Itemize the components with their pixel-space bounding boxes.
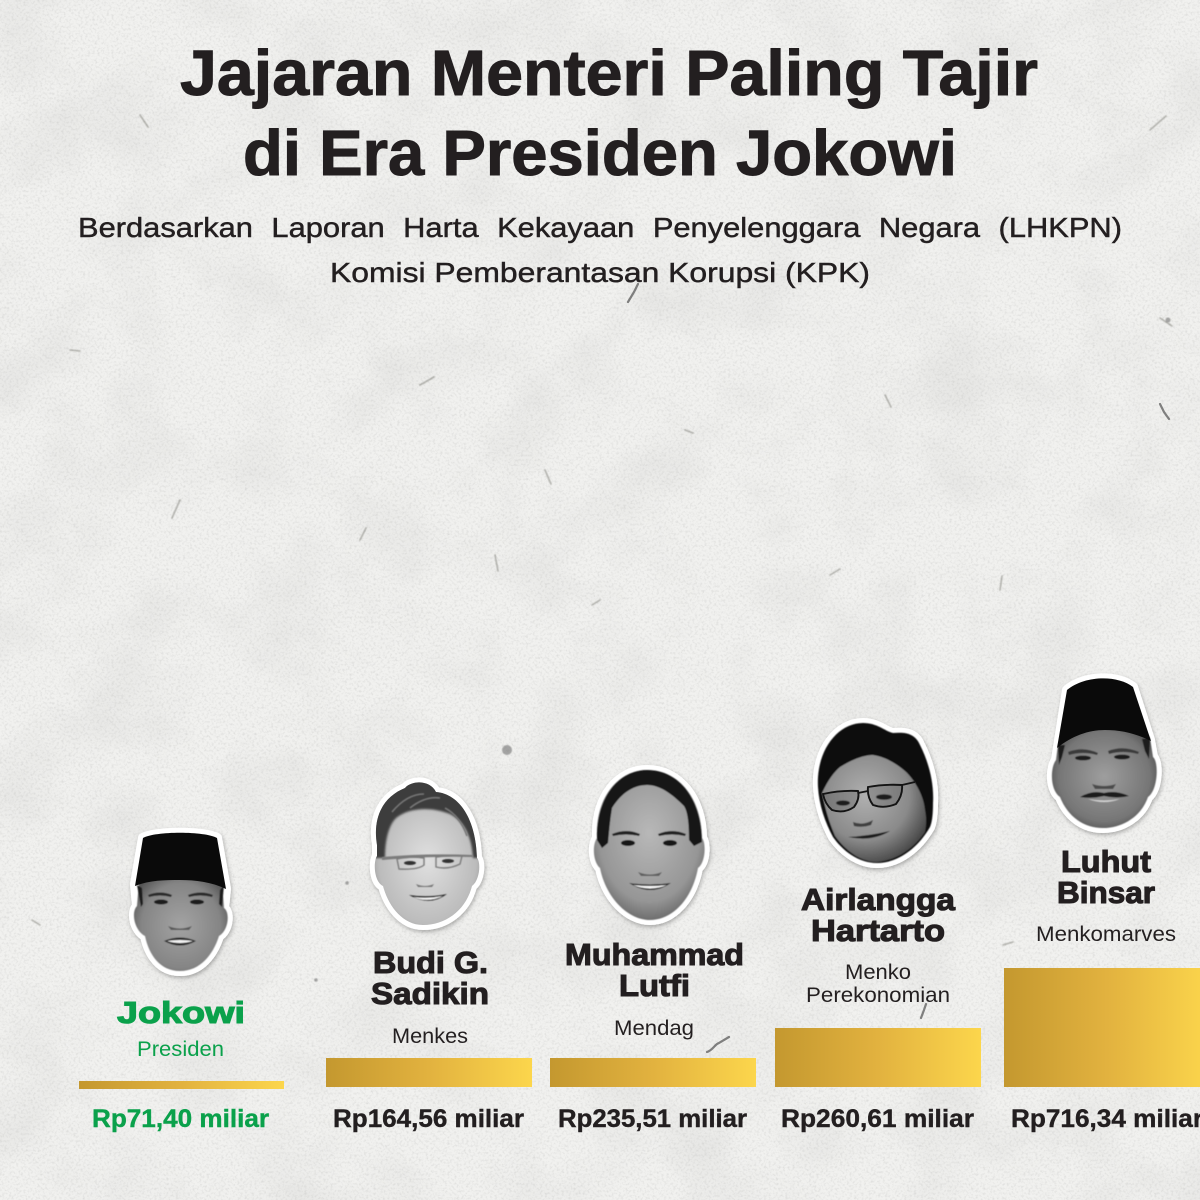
name: Muhammad Lutfi: Muhammad bbox=[565, 937, 744, 972]
value: Rp235,51 miliar: Rp235,51 miliar bbox=[558, 1105, 747, 1133]
value: Rp71,40 miliar: Rp71,40 miliar bbox=[92, 1105, 269, 1133]
bar: Jokowi bbox=[79, 1081, 284, 1089]
name: Muhammad Lutfi bbox=[565, 937, 744, 1003]
bar: Muhammad Lutfi bbox=[550, 1058, 756, 1087]
role: Presiden: Presiden bbox=[137, 1038, 224, 1061]
name: Airlangga Hartarto: Airlangga bbox=[801, 882, 956, 917]
value: Rp164,56 miliar: Rp164,56 miliar bbox=[333, 1105, 524, 1133]
portrait: Jokowi bbox=[134, 833, 228, 971]
portrait: Luhut Binsar bbox=[1052, 678, 1157, 828]
value: Rp260,61 miliar: Rp260,61 miliar bbox=[781, 1105, 974, 1133]
name: Luhut Binsar: Binsar bbox=[1057, 875, 1155, 910]
name: Luhut Binsar bbox=[1057, 844, 1155, 910]
name: Airlangga Hartarto: Hartarto bbox=[811, 913, 945, 948]
subtitle bbox=[78, 212, 1122, 288]
bar: Airlangga Hartarto bbox=[775, 1028, 981, 1087]
bar: Luhut Binsar bbox=[1004, 968, 1200, 1087]
role: Mendag: Mendag bbox=[614, 1017, 694, 1040]
portrait: Muhammad Lutfi bbox=[594, 770, 705, 920]
name: Budi G. Sadikin bbox=[371, 945, 489, 1011]
name: Budi G. Sadikin: Budi G. bbox=[373, 945, 488, 980]
name: Muhammad Lutfi: Lutfi bbox=[619, 968, 690, 1003]
role: Menko Perekonomian: Perekonomian bbox=[806, 984, 950, 1007]
title: Jajaran Menteri Paling Tajir bbox=[180, 37, 1038, 109]
column: Luhut Binsar bbox=[1004, 678, 1200, 1133]
role: Menko Perekonomian bbox=[806, 961, 950, 1007]
column: Airlangga Hartarto bbox=[775, 723, 981, 1133]
column: Jokowi bbox=[79, 833, 284, 1133]
column: Budi G. Sadikin bbox=[326, 778, 532, 1133]
title bbox=[180, 37, 1038, 189]
subtitle: Berdasarkan Laporan Harta Kekayaan Penyelenggara Negara (LHKPN) bbox=[78, 212, 1122, 243]
column: Muhammad Lutfi bbox=[550, 770, 756, 1133]
role: Menko Perekonomian: Menko bbox=[845, 961, 911, 984]
name: Budi G. Sadikin: Sadikin bbox=[371, 976, 489, 1011]
name: Airlangga Hartarto bbox=[801, 882, 956, 948]
portrait: Budi G. Sadikin bbox=[370, 778, 485, 928]
portrait: Airlangga Hartarto bbox=[818, 723, 933, 863]
role: Menkomarves: Menkomarves bbox=[1036, 923, 1176, 946]
value: Rp716,34 miliar: Rp716,34 miliar bbox=[1011, 1105, 1200, 1133]
subtitle: Komisi Pemberantasan Korupsi (KPK) bbox=[330, 257, 870, 288]
title: di Era Presiden Jokowi bbox=[243, 117, 957, 189]
bar: Budi G. Sadikin bbox=[326, 1058, 532, 1087]
name: Jokowi: Jokowi bbox=[117, 995, 245, 1030]
name: Luhut Binsar: Luhut bbox=[1061, 844, 1151, 879]
role: Menkes: Menkes bbox=[392, 1025, 468, 1048]
